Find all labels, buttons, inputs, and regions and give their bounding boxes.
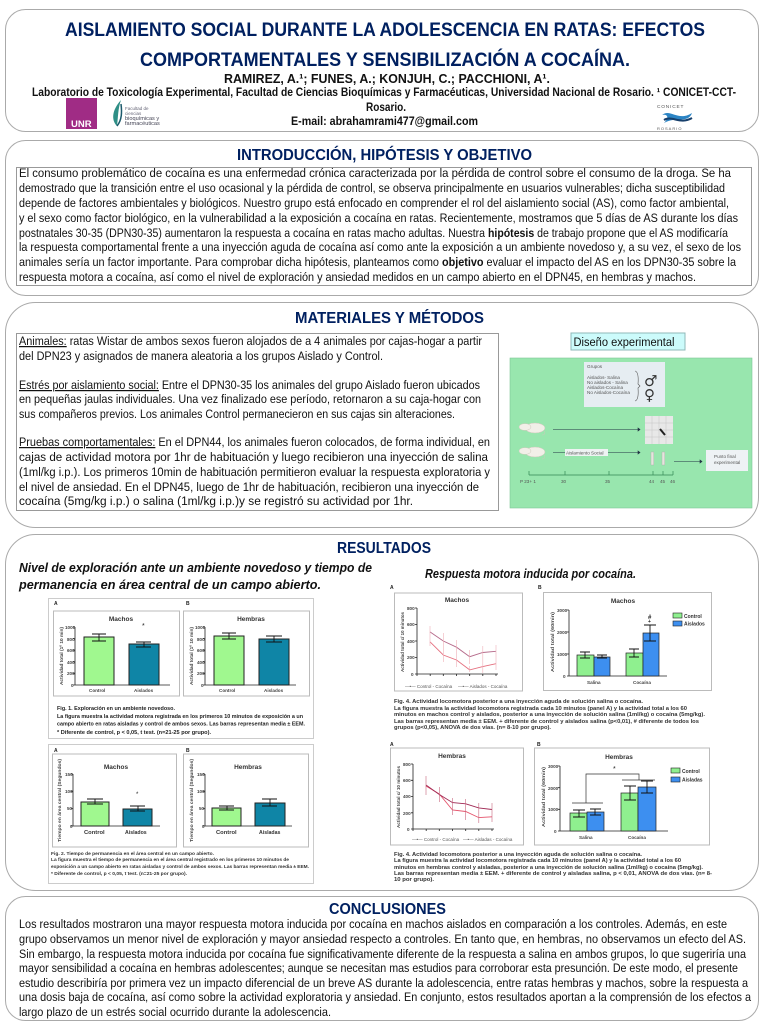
box: grupos: No aislados - Salina (587, 380, 628, 385)
line chart: machos: Machos (445, 597, 469, 604)
caption: figure 4 hembras: Fig. 4. Actividad locomotora posterior a una inyección aguda de solución salina o cocaína. (394, 852, 643, 858)
bar chart: machos: 200 (67, 671, 75, 676)
caption: figure 1: Fig. 1. Exploración en un ambiente novedoso. (57, 706, 175, 712)
figure 1: B (186, 601, 190, 607)
bar chart: machos actividad total: Machos (611, 598, 635, 605)
subheading: exploración (18, 560, 372, 592)
line chart: machos: —•— Control - Cocaína (405, 684, 453, 689)
subheading: exploración: permanencia en área central de un campo abierto. (18, 577, 321, 592)
text block: métodos: Estrés por aislamiento social: Entre el DPN30-35 los animales del grupo Aislado fueron ubicados (19, 378, 480, 392)
caption: figure 4 machos: Fig. 4. Actividad locomotora posterior a una inyección aguda de solución salina o cocaína. (394, 699, 644, 705)
bar chart: hembras: Control (219, 688, 235, 693)
bar chart: machos tiempo: 100 (65, 789, 73, 794)
bar chart: machos actividad total: 0 (563, 674, 566, 679)
legend: Aislados (684, 622, 705, 628)
bar chart: hembras tiempo: 0 (202, 824, 205, 829)
panel: conclusiones (6, 896, 758, 1020)
bar chart: hembras actividad total: Cocaína (628, 835, 646, 840)
bar chart: machos tiempo: 50 (67, 806, 73, 811)
text block: introducción: postnatales 30-35 (DPN30-35) aumentaron la respuesta a cocaína en ratas macho adultas. Nuestra hipótesis de trabajo propone que el AS modificaría (19, 226, 728, 240)
line chart: hembras: 600 (403, 778, 411, 783)
caption: figure 1: * Diferente de control, p < 0,05, t test. (n=21-25 por grupo). (57, 730, 212, 736)
line chart: hembras: Hembras (438, 753, 466, 760)
line chart: machos: —•— Aislados - Cocaína (458, 684, 508, 689)
bar chart: hembras actividad total: * (613, 766, 616, 773)
box: punto final experimental (706, 450, 748, 471)
line chart: hembras: 800 (403, 762, 411, 767)
box: punto final experimental: Punto final (714, 454, 736, 459)
figure 4 machos (390, 585, 712, 731)
bar chart: machos: 600 (67, 648, 75, 653)
legend (671, 768, 703, 784)
panel: materiales y métodos (6, 302, 758, 528)
subheading: exploración: Nivel de exploración ante un ambiente novedoso y tiempo de (19, 560, 372, 575)
bar chart: hembras actividad total: 3000 (548, 764, 559, 769)
diagram: diseño experimental (510, 358, 752, 508)
bar chart: machos tiempo (52, 754, 176, 847)
bar chart: machos: * (142, 623, 145, 630)
caption: figure 4 machos: La figura muestra la actividad locomotora registrada cada 10 minutos (panel A) y la actividad total a los 60 (394, 706, 687, 712)
bar chart: machos: 1000 (65, 625, 76, 630)
bar chart: hembras actividad total: Hembras (605, 754, 633, 761)
title (65, 19, 705, 71)
caption: figure 4 hembras: 10 por grupo). (394, 877, 435, 883)
bar chart: hembras: Actividad total (1º 10 min) (189, 627, 194, 685)
legend (673, 613, 705, 628)
legend: Control (682, 769, 700, 775)
bar chart: machos: Control (89, 688, 105, 693)
logo: CONICET Rosario: ROSARIO (657, 126, 682, 131)
line chart: machos: 400 (407, 639, 415, 644)
icon: syringes (651, 452, 665, 465)
line chart: machos: Actividad total c/ 10 minutos (400, 612, 405, 672)
title: AISLAMIENTO SOCIAL DURANTE LA ADOLESCENCIA EN RATAS: EFECTOS (65, 19, 705, 41)
arrow: control (553, 428, 640, 431)
bar chart: hembras (184, 611, 310, 696)
caption: figure 1: La figura muestra la actividad motora registrada en los primeros 10 minutos de exposición a un (57, 714, 303, 720)
figure 2: A (54, 748, 58, 754)
text block: métodos: el nivel de ansiedad. En el DPN45, luego de 1hr de habituación, recibieron una inyección de (19, 480, 479, 494)
bar chart: machos tiempo: * (136, 792, 139, 798)
logo: Facultad de Ciencias Bioquímicas y Farmacéuticas: farmacéuticas (125, 121, 160, 127)
bar chart: machos tiempo: Tiempo en área central (Segundos) (57, 758, 62, 842)
line chart: machos (394, 593, 522, 691)
line chart: hembras: 400 (403, 794, 411, 799)
subheading: respuesta motora: Respuesta motora inducida por cocaína. (425, 566, 636, 581)
heading: materiales y métodos: MATERIALES Y MÉTODOS (295, 310, 484, 327)
text block: métodos: del DPN23 y asignados de manera aleatoria a los grupos Aislado y Control. (19, 349, 383, 363)
figure 1: A (54, 601, 58, 607)
email: E-mail: abrahamrami477@gmail.com (291, 115, 478, 128)
bar chart: hembras tiempo: 100 (197, 789, 205, 794)
timeline: 44 (649, 479, 655, 484)
bar chart: hembras tiempo: 150 (197, 772, 205, 777)
logo: UNR (66, 98, 97, 130)
arrow: aislamiento social (553, 451, 640, 454)
caption: figure 4 machos: minutos en machos control y aislados, posterior a una inyección de solución salina (1ml/kg) o cocaína (5mg/kg). (394, 712, 706, 718)
legend: Control (684, 614, 702, 620)
timeline: 45 (660, 479, 666, 484)
caption: figure 2: * Diferente de control, p < 0,05, t test. (n=21-25 por grupo). (51, 871, 187, 877)
logo: UNR: UNR (71, 119, 92, 130)
line chart: hembras: 0 (407, 827, 410, 832)
heading: resultados: RESULTADOS (337, 540, 431, 557)
box: grupos: Grupos (587, 364, 603, 369)
box: grupos: ♂ (644, 372, 657, 390)
box: grupos: ♀ (644, 386, 655, 404)
panel: title header (6, 10, 758, 132)
text block: métodos: cajas de actividad motora por 1hr de habituación y luego recibieron una inyección de salina (19, 450, 488, 464)
bar chart: machos: Machos (109, 616, 133, 623)
bar chart: machos tiempo: 150 (65, 772, 73, 777)
timeline: 30 (561, 479, 567, 484)
bar chart: machos actividad total: Actividad total (60min) (550, 611, 555, 672)
arrow: punto final (674, 460, 702, 463)
icon: rat lower (519, 447, 545, 459)
bar chart: machos: 400 (67, 660, 75, 665)
bar chart: machos: Actividad total (1º 10 min) (59, 627, 64, 685)
bar chart: machos actividad total: Cocaína (633, 680, 651, 685)
text block: introducción: respuesta motora a cocaína, así como el nivel de exploración y ansiedad medidos en un campo abierto en el DPN45, en hembras y machos. (19, 270, 696, 284)
bar chart: machos actividad total (544, 592, 712, 690)
box: grupos: No Aislados-Cocaína (587, 390, 630, 395)
line chart: hembras: —•— Control - Cocaína (412, 837, 460, 842)
caption: figure 2: Fig. 2. Tiempo de permanencia en el área central en un campo abierto. (51, 851, 214, 857)
legend: Aisladas (682, 778, 703, 784)
bar chart: machos actividad total: # (648, 615, 652, 621)
caption: figure 2: La figura muestra el tiempo de permanencia en el área central registrado en los primeros 10 minutos de (51, 857, 289, 863)
caption: figure 4 hembras: minutos en hembras control y aisladas, posterior a una inyección de solución salina (1ml/kg) o cocaína (5mg/kg). (394, 865, 704, 871)
caption: figure 4 machos: grupos (p<0,05), ANOVA de dos vías. (n= 8-10 por grupo). (394, 725, 552, 731)
figure 2: B (186, 748, 190, 754)
bar chart: machos tiempo: 0 (70, 824, 73, 829)
caption: figure 1 (57, 706, 305, 736)
label: aislamiento social (565, 449, 608, 456)
text block: métodos: cocaína (5mg/kg i.p.) o salina (1ml/kg i.p.)y se registró su actividad por 1hr. (19, 494, 413, 508)
bar chart: hembras tiempo: 50 (199, 806, 205, 811)
text block: métodos: Pruebas comportamentales: En el DPN44, los animales fueron colocados, de forma individual, en (19, 435, 490, 449)
bar chart: machos tiempo: Machos (104, 764, 128, 771)
bar chart: hembras actividad total: 1000 (548, 807, 559, 812)
caption: figure 4 machos (394, 699, 706, 731)
caption: figure 4 hembras (394, 852, 712, 883)
box: grupos: Aislados- Salina (587, 375, 620, 380)
bar chart: machos: Aislados (134, 688, 154, 693)
text block: métodos (16, 334, 498, 510)
affiliation (32, 86, 736, 114)
figure 4 hembras (390, 742, 712, 883)
box: grupos: Aislados-Cocaína (587, 385, 623, 390)
text block: introducción (16, 166, 752, 286)
caption: figure 4 machos: Las barras representan media ± EEM. + diferente de control y aislados salina (p<0,01), # diferente de todos los (394, 719, 699, 725)
text block: métodos: (1ml/kg i.p.). Los primeros 10min de habituación permitieron evaluar la respuesta exploratoria y (19, 465, 491, 479)
line chart: hembras (390, 748, 524, 845)
bar chart: hembras actividad total: 2000 (548, 786, 559, 791)
bar chart: machos tiempo: Control (84, 830, 105, 836)
figure 1 (48, 598, 314, 738)
timeline: 35 (605, 479, 611, 484)
timeline: 46 (670, 479, 676, 484)
line chart: machos: 600 (407, 622, 415, 627)
bar chart: hembras: 200 (197, 671, 205, 676)
bar chart: machos: 0 (71, 683, 74, 688)
figure 2 (48, 744, 314, 884)
caption: figure 1: campo abierto en ratas aisladas y control de ambos sexos. Las barras representan media ± EEM. (57, 722, 305, 728)
line chart: hembras: Actividad total c/ 10 minutos (396, 766, 401, 828)
line chart: machos: 0 (411, 672, 414, 677)
bar chart: hembras tiempo (184, 754, 308, 847)
text block: métodos: en pequeñas jaulas individuales. Una vez finalizado ese período, retornaron a su caja-hogar con (19, 392, 481, 406)
panel: introducción (6, 140, 758, 296)
bar chart: hembras: 0 (201, 683, 204, 688)
text block: introducción: El consumo problemático de cocaína es una enfermedad crónica caracterizada por la pérdida de control sobre el consumo de la droga. Se ha (19, 166, 731, 180)
bar chart: machos tiempo: Aislados (125, 830, 147, 836)
line chart: hembras: —•— Aisladas - Cocaína (463, 837, 513, 842)
title: COMPORTAMENTALES Y SENSIBILIZACIÓN A COCAÍNA. (140, 47, 630, 71)
caption: figure 2: exposición a un campo abierto en ratas aisladas y control de ambos sexos. Las barras representan media ± EEM. (51, 864, 309, 870)
bar chart: hembras actividad total (534, 748, 710, 845)
figure 4 machos: B (538, 585, 542, 591)
logo: CONICET Rosario (657, 104, 692, 131)
bar chart: hembras: Aislados (264, 688, 284, 693)
bar chart: hembras tiempo: Control (216, 830, 237, 836)
timeline: P 23+ 1 (520, 479, 536, 484)
icon: rat upper (519, 423, 545, 435)
bar chart: machos actividad total: Salina (587, 680, 601, 685)
text block: conclusiones (19, 917, 751, 1019)
heading: introducción: INTRODUCCIÓN, HIPÓTESIS Y OBJETIVO (237, 146, 532, 164)
caption: figure 4 hembras: Las barras representan media ± EEM. + diferente de control y aisladas salina, p < 0,01, ANOVA de dos vías. (n= 8- (394, 871, 712, 877)
logo: Facultad de Ciencias Bioquímicas y Farmacéuticas: Facultad de (125, 106, 149, 111)
caption: figure 4 hembras: La figura muestra la actividad locomotora registrada cada 10 minutos (panel A) y la actividad total a los 60 (394, 858, 681, 864)
figure 4 hembras: A (390, 742, 394, 748)
bar chart: hembras: 1000 (195, 625, 206, 630)
bar chart: machos: 800 (67, 637, 75, 642)
label: aislamiento social: Aislamiento Social (566, 450, 604, 456)
bar chart: machos actividad total: + (648, 619, 651, 625)
panel: resultados (6, 534, 758, 890)
logo: Facultad de Ciencias Bioquímicas y Farmacéuticas: ciencias (125, 111, 142, 116)
bar chart: machos actividad total: 1000 (557, 652, 568, 657)
figure 4 machos: A (390, 585, 394, 591)
bar chart: machos actividad total: 2000 (557, 630, 568, 635)
icon: campo abierto (645, 416, 673, 444)
text block: introducción: animales sería un factor importante. Para comprobar dicha hipótesis, planteamos como objetivo evaluar el impacto del AS en los DPN30-35 sobre la (19, 255, 736, 269)
heading: conclusiones: CONCLUSIONES (329, 901, 446, 918)
bar chart: hembras actividad total: Salina (579, 835, 593, 840)
box: punto final experimental: experimental (714, 460, 740, 465)
bar chart: hembras: 600 (197, 648, 205, 653)
line chart: machos: 800 (407, 606, 415, 611)
label: diseño experimental: Diseño experimental (574, 335, 674, 349)
bar chart: hembras: Hembras (237, 616, 265, 623)
caption: figure 2 (51, 851, 309, 877)
bar chart: hembras: 400 (197, 660, 205, 665)
bar chart: hembras: 800 (197, 637, 205, 642)
bar chart: hembras tiempo: Aisladas (259, 830, 280, 836)
bar chart: machos actividad total: 3000 (557, 608, 568, 613)
bar chart: hembras actividad total: Actividad total (60min) (541, 766, 546, 827)
logo: CONICET Rosario: CONICET (657, 104, 684, 110)
line chart: machos: 200 (407, 655, 415, 660)
bar chart: hembras tiempo: Hembras (234, 764, 262, 771)
text block: conclusiones: largo plazo de un estrés social ocurrido durante la adolescencia. (19, 1005, 331, 1019)
bar chart: hembras actividad total: 0 (554, 829, 557, 834)
box: grupos (584, 362, 665, 407)
authors: RAMIREZ, A.¹; FUNES, A.; KONJUH, C.; PACCHIONI, A¹. (224, 72, 550, 86)
logo: Facultad de Ciencias Bioquímicas y Farmacéuticas (113, 100, 160, 127)
bar chart: hembras tiempo: Tiempo en área central (Segundos) (189, 758, 194, 842)
logo: Facultad de Ciencias Bioquímicas y Farmacéuticas: bioquímicas y (125, 116, 159, 122)
line chart: hembras: 200 (403, 811, 411, 816)
timeline (520, 471, 676, 484)
text block: métodos: sus compañeros previos. Los animales Control permanecieron en sus cajas sin alteraciones. (19, 407, 455, 421)
affiliation: Rosario. (366, 101, 406, 114)
bar chart: machos (54, 611, 180, 696)
figure 4 hembras: B (537, 742, 541, 748)
text block: métodos: Animales: ratas Wistar de ambos sexos fueron alojados de a 4 animales por cajas-hogar a partir (19, 334, 482, 348)
